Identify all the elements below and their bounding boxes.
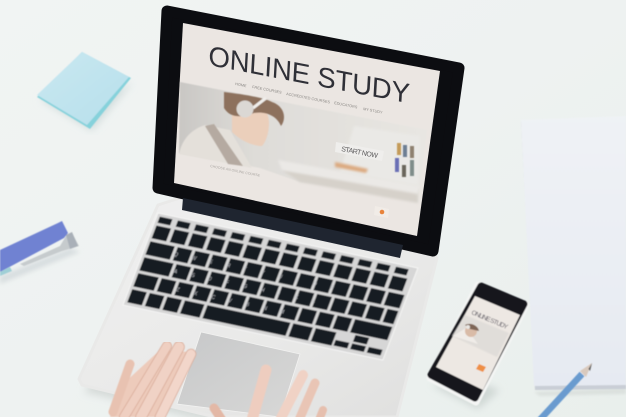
key legends: Y (260, 271, 266, 277)
key legends: B (245, 302, 251, 308)
space bar row (130, 296, 334, 339)
key legends (161, 252, 335, 324)
phone (430, 285, 526, 409)
tab key row (148, 248, 402, 302)
laptop (79, 11, 459, 417)
key legends: L (311, 299, 316, 305)
keyboard (123, 213, 418, 360)
key legends: Z (175, 287, 180, 293)
key legends: S (190, 273, 196, 279)
hands on trackpad (110, 346, 323, 417)
key legends: Q (173, 252, 179, 259)
keyboard well (123, 213, 418, 360)
pencil (536, 363, 592, 417)
navigation menu: HOME (235, 82, 247, 88)
notebook paper stack (521, 116, 626, 396)
key legends: W (190, 256, 197, 262)
key legends: D (207, 277, 213, 283)
key legends: R (225, 263, 231, 270)
key legends: E (208, 260, 214, 266)
woman with headphones (179, 92, 284, 168)
phone title: ONLINE STUDY (470, 309, 509, 331)
key legends: T (242, 267, 247, 273)
key legends: A (172, 269, 179, 276)
key legends: F (224, 280, 229, 287)
hinge (182, 198, 403, 258)
key legends: O (311, 281, 317, 288)
caption text: CHOOSE AN ONLINE COURSE (210, 164, 261, 178)
stapler (0, 221, 80, 284)
arrow keys (335, 343, 382, 353)
palette stand (340, 126, 420, 185)
shift key row (136, 280, 390, 334)
phone body (430, 285, 526, 402)
phone orange button (476, 364, 486, 372)
key legends: I (295, 278, 298, 284)
key legends: N (262, 306, 268, 312)
key legends: X (193, 291, 199, 297)
navigation menu: ACCREDITED COURSES (286, 92, 331, 105)
key legends: K (294, 295, 300, 301)
key legends: C (210, 295, 216, 301)
navigation menu: EDUCATORS (334, 101, 358, 110)
key legends: P (329, 285, 335, 292)
trackpad (177, 332, 300, 417)
right hand (214, 370, 323, 417)
key legends: G (242, 284, 248, 290)
start now button (335, 142, 384, 161)
key legends: H (259, 288, 265, 294)
headphone cup (236, 100, 254, 118)
laptop base (79, 197, 437, 417)
orange chat button (374, 206, 389, 218)
navigation menu (235, 82, 383, 115)
start now button: START NOW (341, 146, 379, 160)
key legends: V (227, 298, 233, 305)
display photo banner (179, 82, 427, 203)
lid bezel (158, 11, 459, 251)
navigation menu: FREE COURSES (252, 85, 282, 95)
screen title: ONLINE STUDY (208, 40, 411, 109)
key legends: U (277, 274, 283, 281)
key legends: M (279, 309, 285, 316)
caps key row (142, 264, 396, 318)
number key row (154, 232, 408, 286)
left hand (110, 346, 191, 417)
display (174, 23, 440, 236)
navigation menu: MY STUDY (363, 107, 383, 115)
function key row (159, 220, 413, 274)
key legends: J (276, 291, 281, 297)
sticky note pad (37, 52, 133, 131)
